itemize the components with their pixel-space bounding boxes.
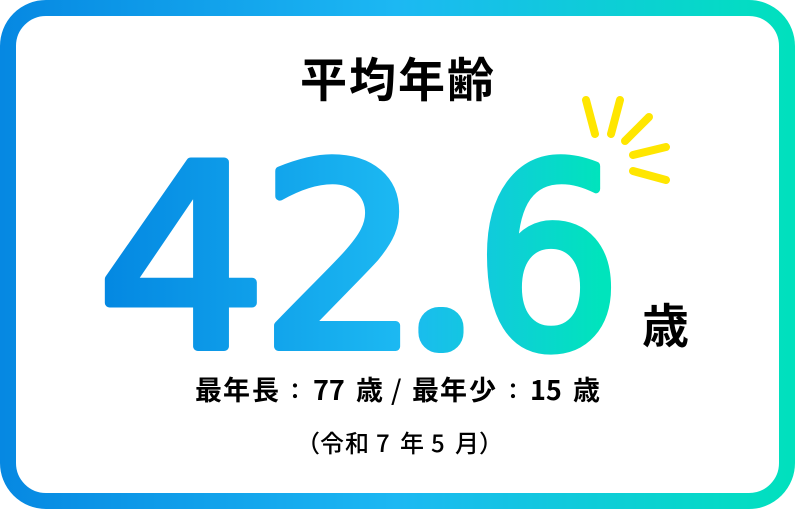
text: oldest and youngest ages: 年	[440, 369, 467, 408]
big number: 42.6: .	[435, 296, 447, 342]
big number: 42.6	[97, 112, 621, 407]
big number: 42.6: 6	[475, 112, 621, 407]
text: oldest and youngest ages: 77	[313, 369, 345, 408]
text: date note: 年	[400, 424, 424, 459]
text: oldest and youngest ages: ：	[502, 374, 524, 406]
text: oldest and youngest ages: ：	[284, 374, 306, 406]
text: date note: 7	[376, 424, 390, 459]
text: oldest and youngest ages: 長	[252, 369, 279, 408]
text: date note: ）	[479, 424, 503, 459]
text: date note: （	[296, 424, 320, 459]
text: oldest and youngest ages: 歳	[573, 369, 600, 408]
title: 平均年齢	[300, 54, 496, 107]
text: oldest and youngest ages: /	[391, 369, 402, 408]
text: date note: 月	[455, 424, 479, 459]
text: oldest and youngest ages: 最	[412, 369, 439, 408]
big number: 42.6: 2	[260, 112, 421, 406]
text: date note: 5	[431, 424, 445, 459]
unit: 歳: 歳	[642, 300, 689, 353]
text: oldest and youngest ages: 最	[195, 369, 222, 408]
text: oldest and youngest ages: 少	[469, 369, 496, 408]
text: date note: 和	[345, 424, 369, 459]
text: oldest and youngest ages: 15	[530, 369, 562, 408]
icon: yellow sparkle lines	[586, 100, 666, 180]
big number: 42.6: 4	[97, 113, 267, 407]
text: oldest and youngest ages: 年	[223, 369, 250, 408]
text: oldest and youngest ages: 歳	[356, 369, 383, 408]
text: date note: 令	[320, 424, 344, 459]
